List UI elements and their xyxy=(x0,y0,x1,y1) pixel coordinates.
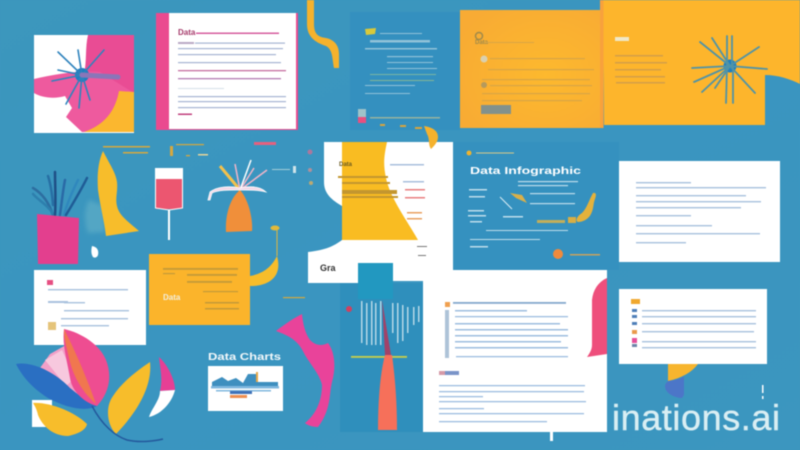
panel: right lower white card xyxy=(619,289,767,398)
panel: document with pink edge xyxy=(156,13,298,130)
panel: left white card xyxy=(34,270,146,345)
icon: yellow sail shape xyxy=(85,151,139,258)
text lines xyxy=(615,55,667,84)
icon: sunburst xyxy=(692,36,767,103)
arrow: yellow squiggle connector xyxy=(307,0,339,68)
panel: centre document with yellow band xyxy=(308,142,453,283)
panel: centre document with yellow band: Data xyxy=(339,162,353,168)
panel: small illustration card xyxy=(208,366,283,411)
heading: Data Infographic xyxy=(470,166,582,177)
icon: sunburst xyxy=(52,50,118,108)
heading: Data xyxy=(178,28,196,37)
panel: top-right orange panel xyxy=(600,0,800,128)
panel: yellow note with handle: Data xyxy=(163,293,181,302)
heading xyxy=(615,37,629,41)
heading: small card title: Data Charts xyxy=(208,352,282,363)
panel: yellow note with handle xyxy=(149,226,280,325)
icon: plant in pink pot xyxy=(33,172,87,264)
icon: orange fan plant xyxy=(208,160,267,232)
watermark text: inations.ai xyxy=(612,397,780,438)
label: Gra xyxy=(320,263,337,273)
small connector text marks xyxy=(103,142,296,173)
icon: feather and leaves xyxy=(16,329,175,442)
panel: blue data panel xyxy=(454,142,619,270)
panel: art card with sunburst xyxy=(34,35,134,133)
brush speckles xyxy=(361,301,420,345)
text lines xyxy=(365,33,440,118)
panel: bottom large document xyxy=(423,270,607,432)
arrow: curved yellow connector xyxy=(380,124,438,149)
panel: orange text panel: Data xyxy=(475,40,489,46)
panel: brush illustration xyxy=(340,263,423,432)
icon: orange dot xyxy=(553,249,563,259)
icon: glass xyxy=(156,168,182,240)
icon: yellow bell xyxy=(577,193,596,222)
panel: orange text panel xyxy=(460,10,603,128)
icon: pink curved ribbon xyxy=(276,314,334,427)
panel: right white card xyxy=(619,161,780,262)
panel: blue text panel xyxy=(350,12,460,130)
small decorative marks xyxy=(283,150,313,298)
button xyxy=(481,105,511,114)
